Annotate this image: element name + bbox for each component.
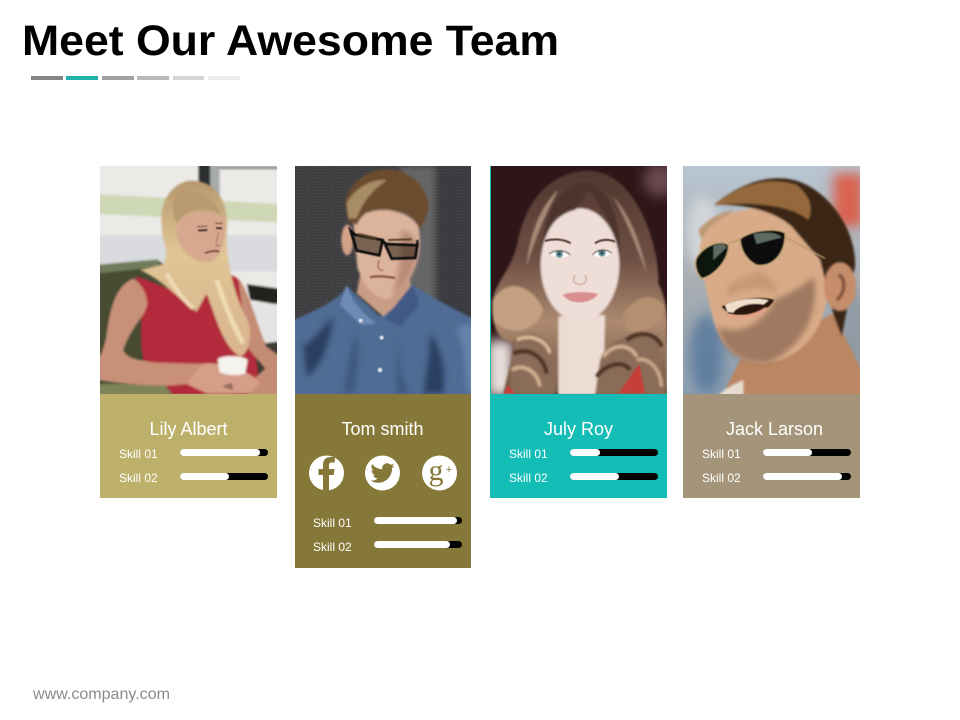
icon: facebook: [309, 456, 344, 491]
team card: Tom smith: [290, 160, 477, 568]
footer website: www.company.com: [32, 686, 170, 703]
title accent bars: [31, 76, 240, 80]
skill 02 label: Skill 02: [119, 471, 158, 485]
icon: google plus: g: [428, 454, 444, 487]
photo edge accent: [490, 166, 491, 394]
panel: Jack Larson: [683, 394, 860, 498]
skill 01 label: Skill 01: [702, 447, 741, 461]
name: Jack Larson: Jack Larson: [726, 419, 823, 439]
panel: Lily Albert: [100, 394, 277, 498]
photo: July Roy: [491, 166, 667, 394]
skill 01 label: Skill 01: [313, 516, 352, 530]
skill 01 bar: [570, 449, 658, 456]
icon: twitter: [365, 456, 400, 490]
name: July Roy: July Roy: [544, 419, 613, 439]
photo: Jack Larson: [683, 166, 860, 394]
icon: google plus: [422, 454, 457, 490]
name: Lily Albert: Lily Albert: [149, 419, 228, 439]
skill 02 bar: [763, 473, 851, 480]
team card: Lily Albert: [100, 166, 277, 498]
photo: Tom smith: [295, 166, 471, 394]
name: Tom smith: Tom smith: [341, 419, 424, 439]
panel: July Roy: [490, 394, 667, 498]
skill 02 label: Skill 02: [702, 471, 741, 485]
skill 02 label: Skill 02: [509, 471, 548, 485]
skill 02 label: Skill 02: [313, 540, 352, 554]
skill 01 bar: [374, 517, 462, 524]
team card: Jack Larson: [677, 160, 867, 498]
title: Meet Our Awesome Team: [22, 17, 559, 65]
skill 01 label: Skill 01: [119, 447, 158, 461]
skill 02 bar: [180, 473, 268, 480]
skill 01 bar: [763, 449, 851, 456]
panel: Tom smith: [295, 394, 471, 568]
team card: July Roy: [490, 166, 667, 498]
skill 01 bar: [180, 449, 268, 456]
photo: Lily Albert: [100, 166, 277, 394]
skill 02 bar: [374, 541, 462, 548]
skill 01 label: Skill 01: [509, 447, 548, 461]
skill 02 bar: [570, 473, 658, 480]
icon: google plus: +: [446, 464, 452, 476]
